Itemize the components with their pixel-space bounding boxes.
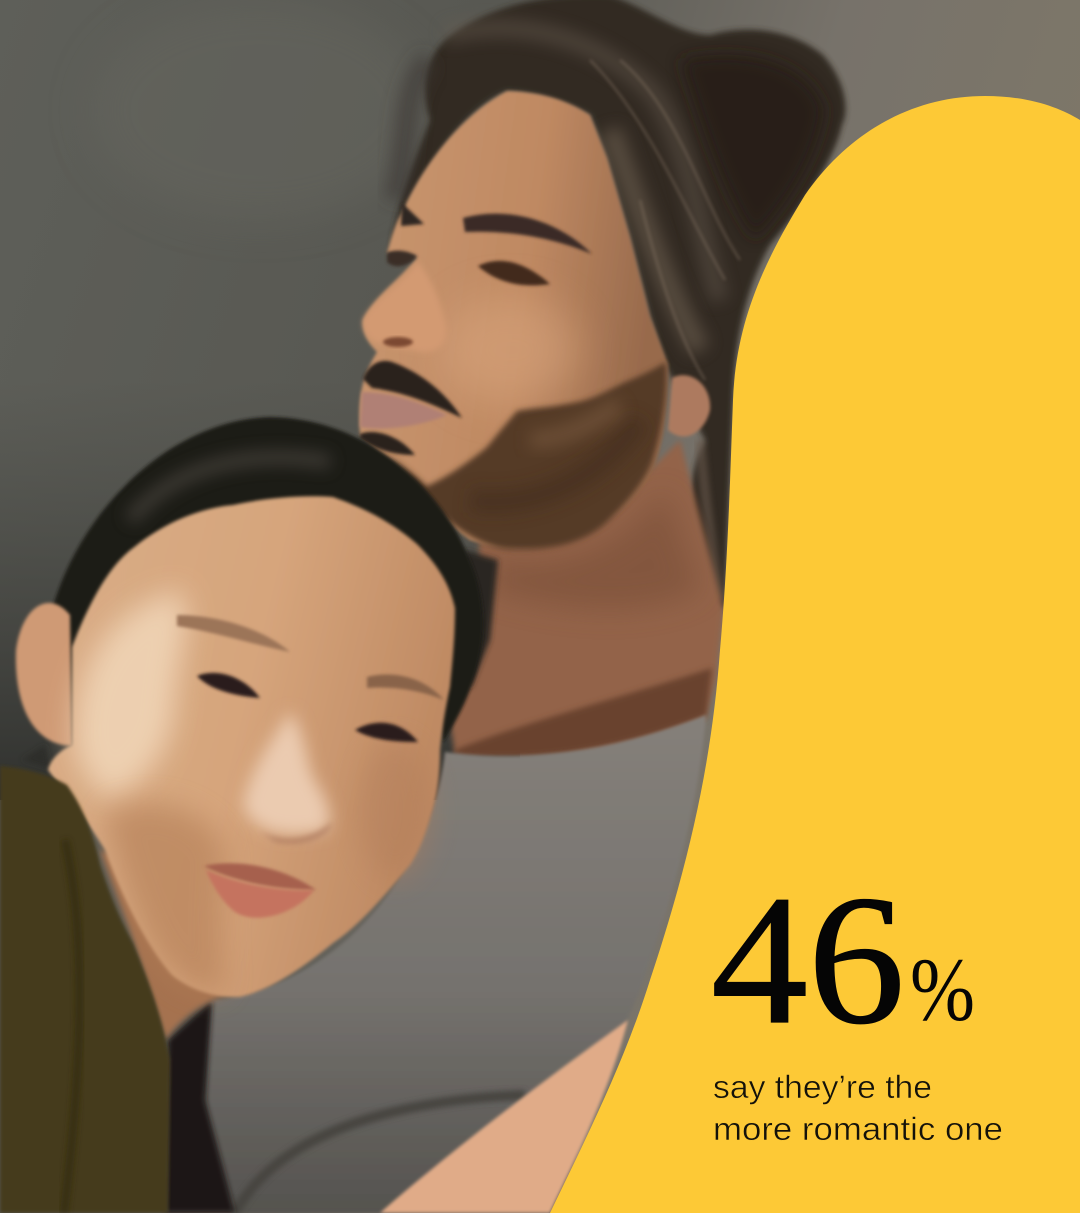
- woman: nose: [243, 712, 330, 835]
- woman: hair shine: [130, 458, 330, 520]
- woman: olive top: [0, 766, 170, 1213]
- man: gap behind woman's hair: [465, 550, 498, 690]
- woman: nose tip shadow: [250, 822, 332, 844]
- woman: eyes: [197, 673, 418, 742]
- man: nostril: [383, 337, 413, 347]
- statistic: 46%: %: [910, 941, 975, 1040]
- woman: right cheek shadow: [359, 740, 431, 880]
- man: chin patch: [360, 432, 415, 455]
- caption: say they’re the: [713, 1069, 932, 1105]
- man: collar shadow: [455, 668, 712, 757]
- man: hair: [390, 0, 846, 610]
- woman: hair: [52, 417, 483, 742]
- woman: face: [48, 496, 455, 997]
- man: grey shirt: [207, 715, 706, 1213]
- man: dark gap under chin: [165, 1000, 235, 1213]
- man: shirt shadow fold: [235, 1095, 525, 1213]
- man: eyes: [387, 251, 550, 285]
- woman: arm: [380, 1020, 628, 1213]
- man: neck and chest: [450, 440, 724, 755]
- woman: neck: [100, 850, 240, 1040]
- man: beard: [385, 362, 666, 549]
- caption: [713, 1069, 1003, 1147]
- man: lips: [360, 392, 447, 429]
- woman: lower cheek shadow: [105, 804, 225, 991]
- man: eyebrows: [401, 203, 592, 254]
- man: face: [359, 91, 668, 548]
- statistic: 46%: 46: [711, 858, 905, 1063]
- yellow blob panel: [550, 96, 1080, 1213]
- woman: lips: [204, 863, 316, 918]
- man: nose: [363, 262, 446, 352]
- woman: hair wisps below ear: [22, 745, 50, 768]
- woman: lit cheek and temple: [74, 590, 186, 800]
- caption: more romantic one: [713, 1111, 1003, 1147]
- woman: ear: [16, 603, 72, 746]
- man: ear: [668, 375, 710, 436]
- woman: sleeve fold: [64, 840, 80, 1213]
- man: cheek highlight: [440, 295, 580, 405]
- man: moustache: [363, 361, 462, 418]
- woman: eyebrows: [177, 615, 444, 700]
